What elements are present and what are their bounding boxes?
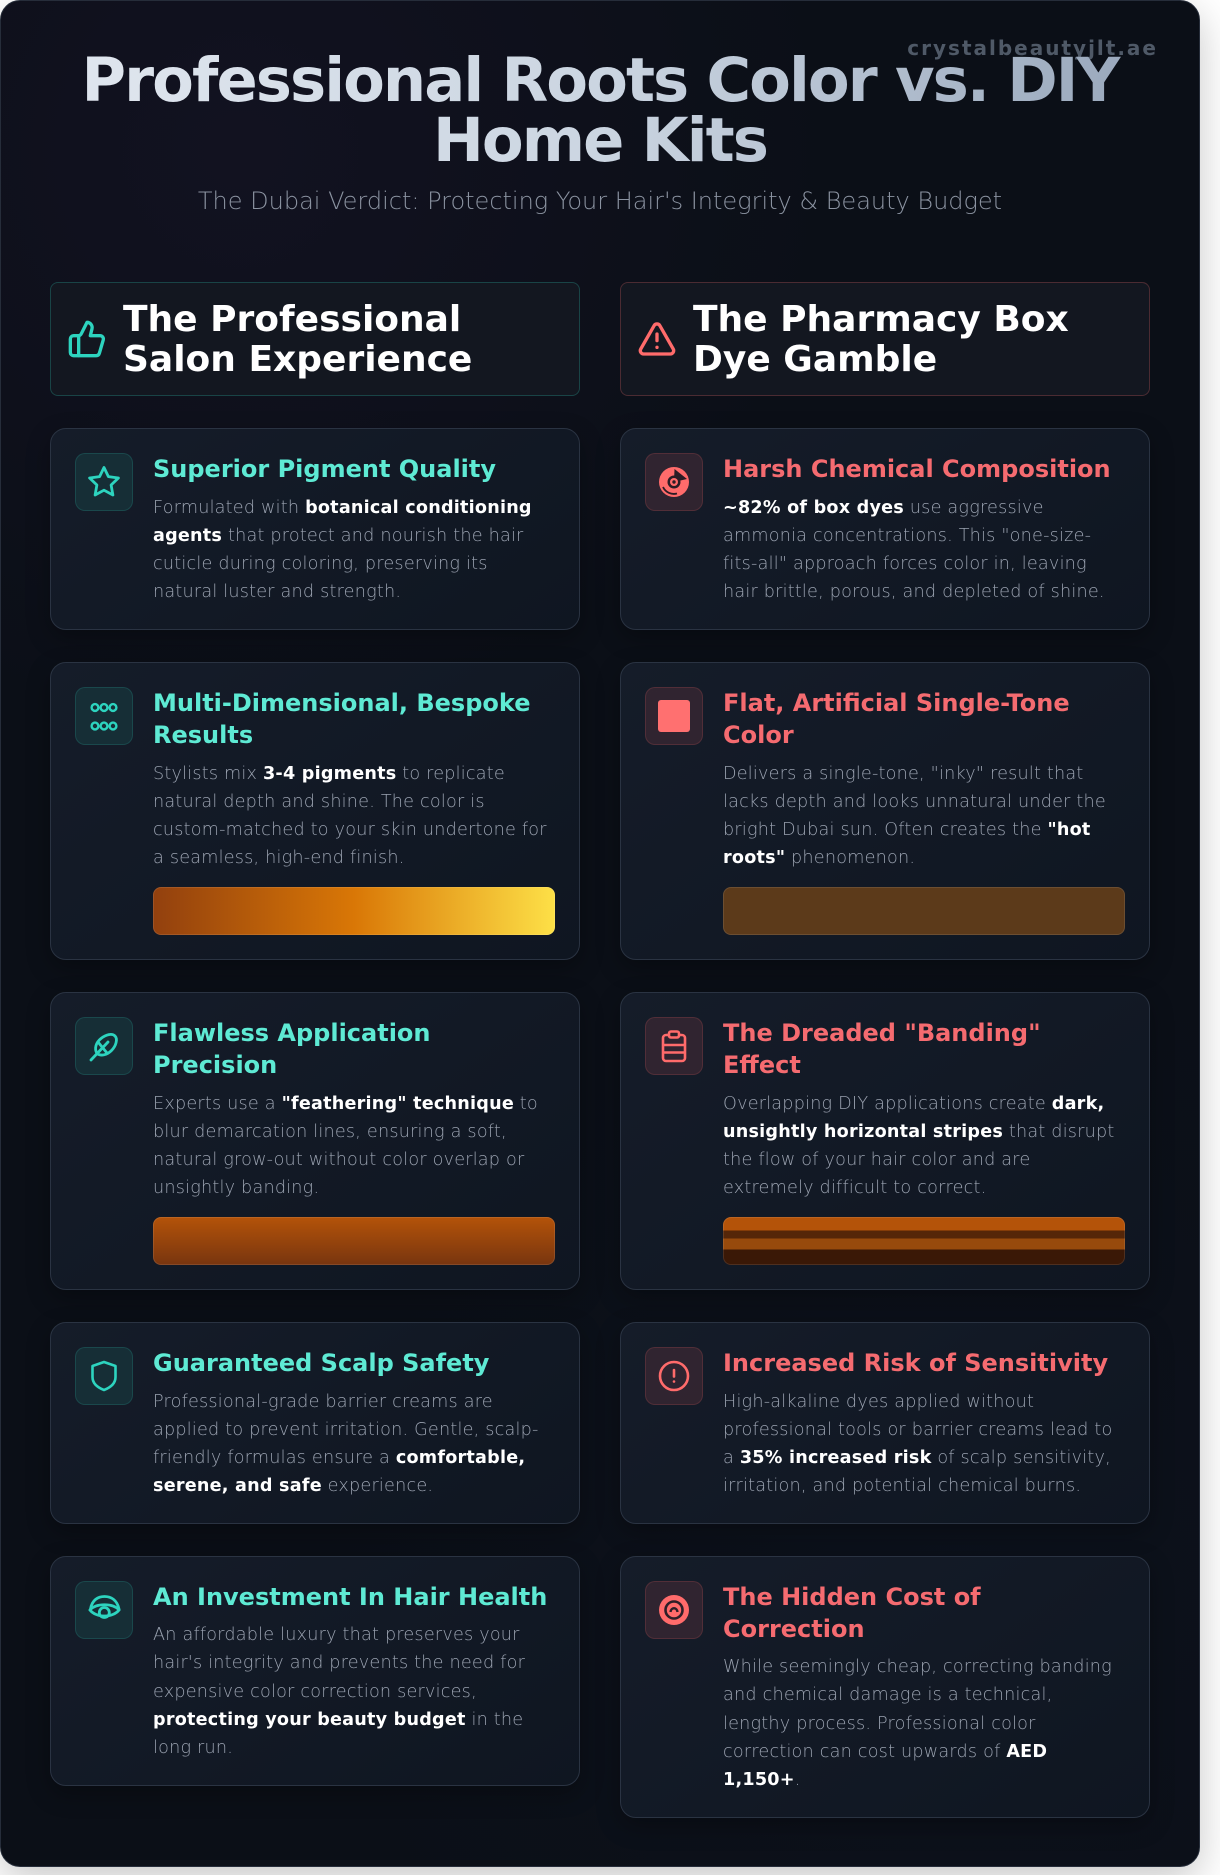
column heading: professional salon [50, 282, 580, 396]
panel: guaranteed scalp safety [50, 1322, 580, 1524]
icon: pigment dots [75, 687, 133, 745]
column: professional benefits [50, 428, 580, 1786]
text block [153, 689, 555, 935]
text block: Increased Risk of Sensitivity [723, 1349, 1108, 1377]
heading text [693, 299, 1069, 380]
icon: clipboard [645, 1017, 703, 1075]
text block: Formulated with botanical conditioning agents that protect and nourish the hair cuticle during coloring, preserving its natural luster and strength. [153, 498, 532, 602]
text block [723, 689, 1125, 935]
icon: feather [75, 1017, 133, 1075]
text block: ~82% of box dyes use aggressive ammonia concentrations. This "one-size-fits-all" approach forces color in, leaving hair brittle, porous, and depleted of shine. [723, 498, 1105, 602]
watermark: crystalbeautyjlt.ae [907, 36, 1158, 60]
text block: Multi-Dimensional, Bespoke Results [153, 689, 530, 749]
heading text: Salon Experience [123, 339, 472, 380]
icon: thumbs up [68, 320, 105, 358]
panel: flawless application [50, 992, 580, 1290]
text block: An affordable luxury that preserves your hair's integrity and prevents the need for expensive color correction services, protecting your beauty budget in the long run. [153, 1625, 525, 1758]
panel: investment in hair health [50, 1556, 580, 1786]
icon: shield [75, 1347, 133, 1405]
heading text: Dye Gamble [693, 339, 937, 380]
title [1, 51, 1199, 171]
text block: The Dreaded "Banding" Effect [723, 1019, 1041, 1079]
title: Home Kits [433, 106, 767, 176]
color swatch: flat tone [723, 887, 1125, 935]
panel: flat single-tone color [620, 662, 1150, 960]
icon: eye [75, 1581, 133, 1639]
panel: harsh chemical composition [620, 428, 1150, 630]
title: Professional Roots Color vs. DIY [82, 46, 1118, 116]
color swatch: multi-tone gradient [153, 887, 555, 935]
panel: superior pigment quality [50, 428, 580, 630]
column heading: pharmacy box dye [620, 282, 1150, 396]
text block: Flawless Application Precision [153, 1019, 430, 1079]
color swatch: banded stripes [723, 1217, 1125, 1265]
panel: multi-dimensional results [50, 662, 580, 960]
heading text: The Professional [123, 299, 461, 340]
text block: Guaranteed Scalp Safety [153, 1349, 489, 1377]
icon: alert circle [645, 1347, 703, 1405]
text block: Overlapping DIY applications create dark, unsightly horizontal stripes that disrupt the flow of your hair color and are extremely difficult to correct. [723, 1094, 1115, 1198]
text block: While seemingly cheap, correcting banding and chemical damage is a technical, lengthy process. Professional color correction can cost upwards of AED 1,150+. [723, 1657, 1112, 1790]
column: box dye risks [620, 428, 1150, 1818]
text block [723, 1019, 1125, 1265]
text block: Experts use a "feathering" technique to blur demarcation lines, ensuring a soft, natural grow-out without color overlap or unsightly banding. [153, 1094, 538, 1198]
icon: target [645, 1581, 703, 1639]
text block [153, 1019, 555, 1265]
text block: Flat, Artificial Single-Tone Color [723, 689, 1070, 749]
text block [723, 1583, 1112, 1790]
text block: High-alkaline dyes applied without professional tools or barrier creams lead to a 35% increased risk of scalp sensitivity, irritation, and potential chemical burns. [723, 1392, 1112, 1496]
color swatch: feathered blend [153, 1217, 555, 1265]
panel: risk of sensitivity [620, 1322, 1150, 1524]
text block: The Hidden Cost of Correction [723, 1583, 981, 1643]
text block: An Investment In Hair Health [153, 1583, 547, 1611]
text block: Delivers a single-tone, "inky" result that lacks depth and looks unnatural under the bright Dubai sun. Often creates the "hot roots" phenomenon. [723, 764, 1106, 868]
panel: banding effect [620, 992, 1150, 1290]
text block: Superior Pigment Quality [153, 455, 496, 483]
icon: star [75, 453, 133, 511]
heading text: The Pharmacy Box [693, 299, 1069, 340]
panel: hidden cost of correction [620, 1556, 1150, 1818]
icon: disc [645, 453, 703, 511]
subtitle: The Dubai Verdict: Protecting Your Hair's Integrity & Beauty Budget [198, 187, 1002, 215]
text block: Stylists mix 3-4 pigments to replicate natural depth and shine. The color is custom-matched to your skin undertone for a seamless, high-end finish. [153, 764, 547, 868]
icon: warning triangle [638, 322, 676, 356]
text block: Harsh Chemical Composition [723, 455, 1111, 483]
heading text [123, 299, 472, 380]
icon: solid square [645, 687, 703, 745]
text block: Professional-grade barrier creams are applied to prevent irritation. Gentle, scalp-friendly formulas ensure a comfortable, serene, and safe experience. [153, 1392, 539, 1496]
